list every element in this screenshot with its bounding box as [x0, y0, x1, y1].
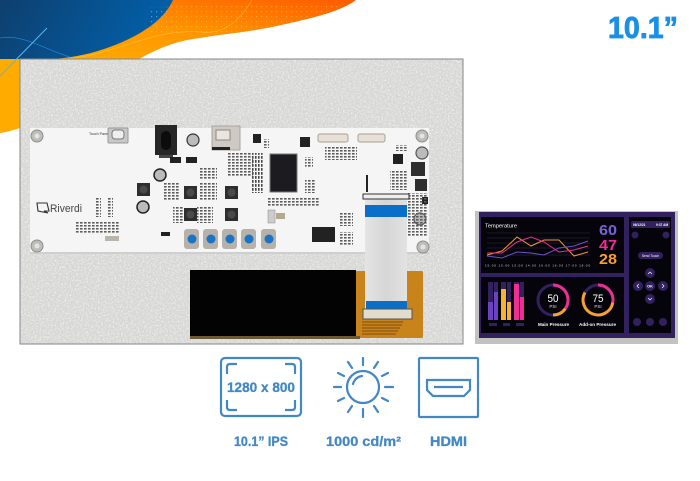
connectors: usb-c, power jack, hdmi: Touch Panel [89, 132, 109, 136]
panel: bars and pressure gauges: 75 [592, 293, 604, 305]
label: brightness: 1000 cd/m² [326, 433, 401, 449]
display module photo [20, 59, 463, 344]
header wave background [0, 0, 356, 133]
inductors and capacitors [137, 134, 428, 225]
screen ui preview [475, 211, 678, 344]
icon: resolution: 1280 x 800 [227, 379, 295, 395]
icon: resolution [221, 358, 301, 416]
panel: temperature chart [481, 217, 624, 273]
dip switch [312, 227, 335, 242]
lcd driver flex and black strip [190, 270, 423, 339]
panel: control buttons: OK [647, 284, 653, 288]
icon: brightness sun [334, 358, 393, 417]
Riverdi logo [37, 203, 82, 215]
label: hdmi: HDMI [430, 433, 467, 449]
ribbon cable [363, 194, 412, 319]
panel: bars and pressure gauges: PSI [594, 304, 602, 309]
panel: bars and pressure gauges: 50 [548, 293, 558, 305]
panel: control buttons: 06/12/21 [633, 223, 646, 227]
main processor chip [270, 154, 297, 192]
label: 10.1 inch IPS: 10.1” IPS [234, 433, 288, 449]
title: 10.1 inch: 10.1” [608, 10, 678, 45]
panel: temperature chart: 47 [599, 238, 617, 254]
connectors: usb-c, power jack, hdmi [89, 125, 385, 158]
white control board [30, 128, 429, 254]
panel: bars and pressure gauges: Add-on Pressure [579, 322, 616, 327]
panel: temperature chart: 28 [599, 252, 617, 268]
surface mount parts [75, 134, 427, 245]
Riverdi logo: Riverdi [50, 203, 82, 215]
panel: bars and pressure gauges: Main Pressure [538, 322, 569, 327]
panel: bars and pressure gauges: PSI [549, 304, 557, 309]
icon: hdmi port [419, 358, 478, 417]
panel: temperature chart: 60 [599, 223, 617, 239]
metal back panel [20, 59, 463, 344]
panel: control buttons: Send Touch [642, 254, 659, 258]
panel: temperature chart: 15:00 15:00 15:00 14:00 16:00 16:00 17:00 18:00 [485, 264, 590, 268]
panel: bars and pressure gauges [481, 277, 624, 333]
panel: control buttons: 9:37 AM [656, 223, 668, 227]
panel: control buttons [629, 217, 671, 333]
panel: temperature chart: Temperature [485, 224, 517, 230]
push buttons [184, 229, 276, 249]
